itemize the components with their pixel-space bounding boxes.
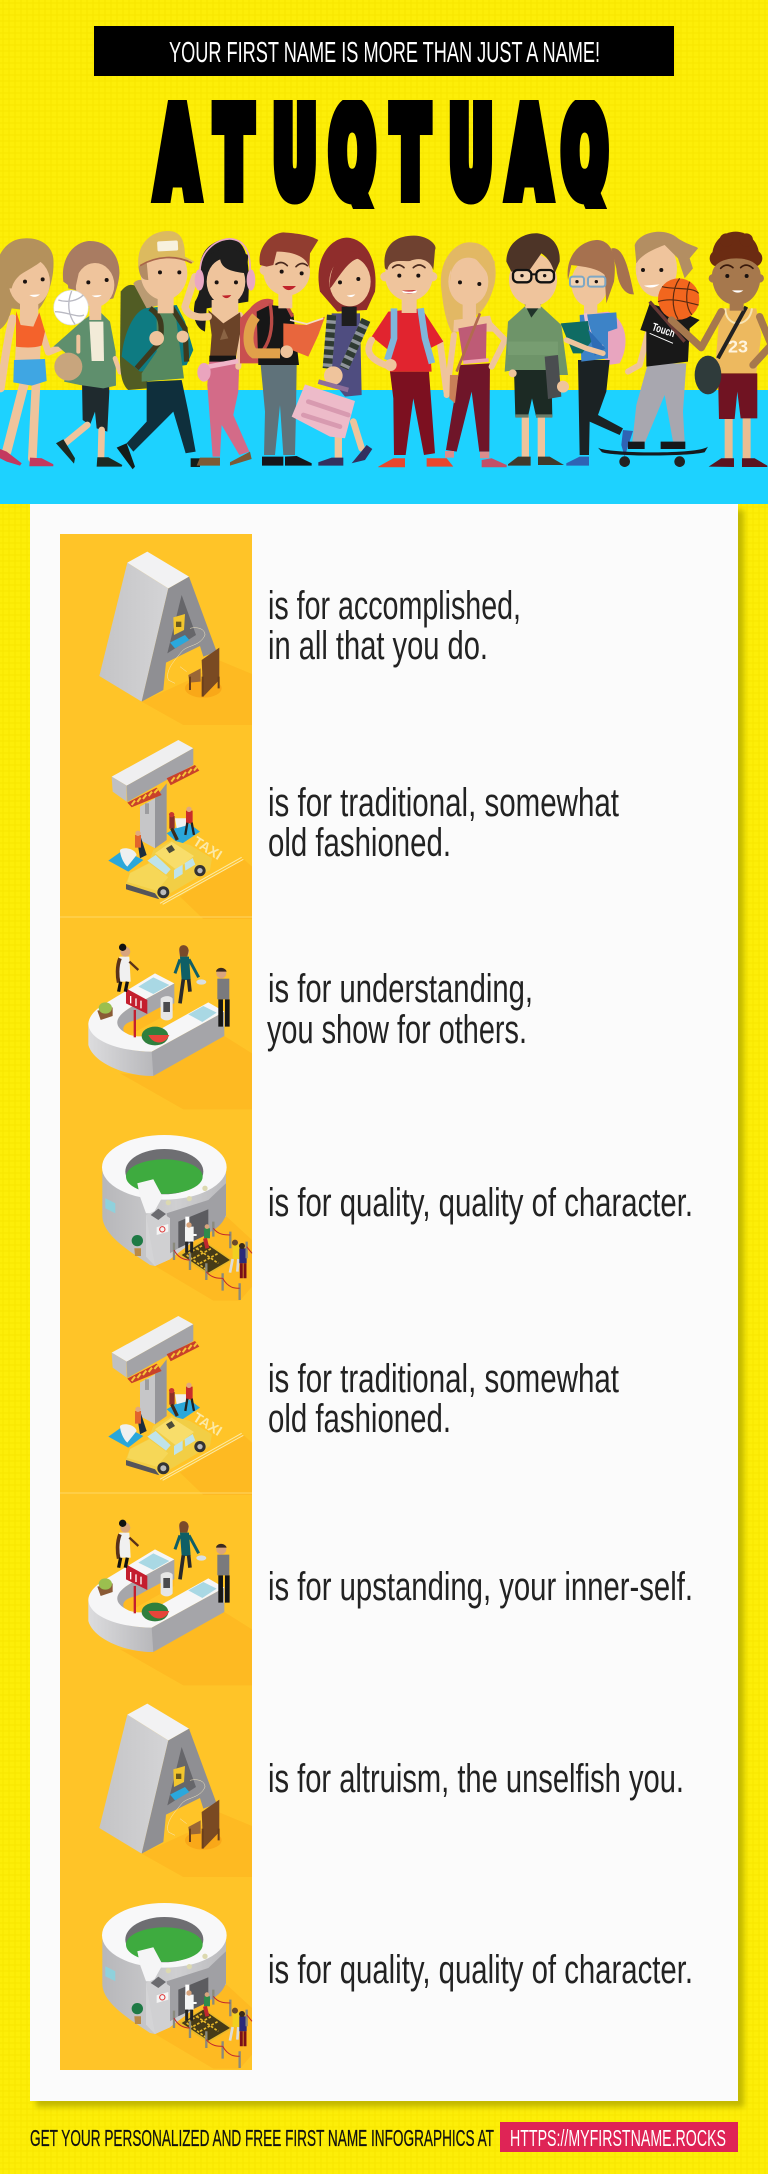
student 2: girl with volleyball [53,241,122,467]
text: traditional: old fashioned. [268,821,451,865]
text: accomplished: is for accomplished, [268,584,521,628]
row 3: letter U [88,944,533,1109]
icon: isometric letter Q building [102,1903,252,2069]
icon: isometric letter U restaurant [88,944,252,1109]
text: understanding: is for understanding, [268,967,533,1011]
title: name: ATUQTUAQ [157,86,607,221]
text: traditional [268,781,619,865]
row 6: letter U [88,1520,693,1685]
text: accomplished: in all that you do. [268,624,488,668]
student 1: girl in orange top [0,238,78,466]
text: traditional: is for traditional, somewhat [268,1357,619,1401]
student 3: hiker with cap and backpack [117,231,200,469]
student 10: girl with ponytail and tablet [561,240,634,466]
icon: isometric letter T with taxi [108,1316,252,1495]
student 7: boy in red shirt [369,236,453,467]
student 9: boy in glasses [505,233,569,466]
row 2: letter T [108,740,619,919]
text: traditional [268,1357,619,1441]
icon: isometric letter U restaurant [88,1520,252,1685]
student 12: boy in basketball tank: 23 [728,336,748,356]
text: traditional: is for traditional, somewhat [268,781,619,825]
row 4: letter Q [102,1135,693,1301]
row 5: letter T [108,1316,619,1495]
illustration: group of twelve students [0,231,768,469]
text: accomplished [268,584,521,668]
student 6: girl with pink bag [292,238,376,466]
student 12: boy in basketball tank [671,232,768,467]
student 5: boy reading a book [240,232,325,466]
blue floor band [0,390,768,504]
banner: tagline [94,26,674,76]
icon: isometric letter A [99,552,252,725]
icon: isometric letter T with taxi [108,740,252,919]
text: understanding [267,967,533,1052]
student 11: skateboarder with basketball: Touch [650,321,676,340]
white content panel [30,504,744,2107]
student 8: blonde girl [441,242,507,467]
row 8: letter Q [102,1903,693,2069]
student 4: girl with headphones [185,239,255,466]
student 11: skateboarder with basketball [598,232,708,467]
row 7: letter A [99,1704,684,1877]
text: traditional: old fashioned. [268,1397,451,1441]
icon: isometric letter Q building [102,1135,252,1301]
row 1: letter A [99,552,521,725]
text: understanding: you show for others. [267,1008,527,1052]
orange tile column [60,534,252,2070]
icon: isometric letter A [99,1704,252,1877]
